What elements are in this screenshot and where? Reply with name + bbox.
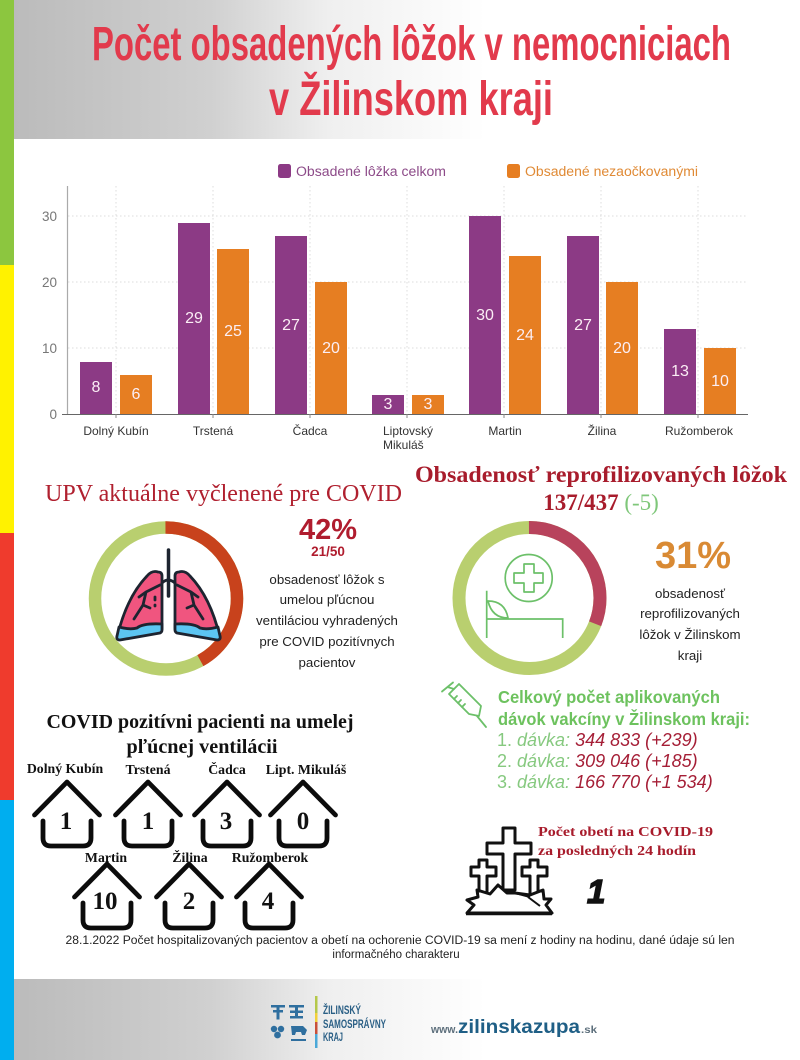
text: beds description: lôžok v Žilinskom [639, 627, 741, 642]
x axis labels: Martin [488, 424, 522, 438]
footnote [66, 935, 735, 961]
house: Žilina [156, 849, 222, 928]
heading: reprofiled beds: Obsadenosť reprofilizovaných lôžok [415, 462, 787, 487]
x axis labels: Čadca [293, 423, 328, 438]
website [430, 1016, 597, 1038]
y axis labels [42, 209, 57, 422]
y axis labels: 10 [42, 341, 57, 356]
bar values: 29 [185, 310, 203, 327]
heading: UPV: UPV aktuálne vyčlenené pre COVID [45, 481, 402, 507]
bar values [92, 307, 729, 413]
chart legend: Obsadené lôžka celkom [296, 164, 446, 179]
heading: ventilated patients: COVID pozitívni pacienti na umelej [46, 711, 354, 733]
heading: reprofiled beds [415, 462, 787, 515]
logo: Žilinský samosprávny kraj: SAMOSPRÁVNY [323, 1018, 386, 1031]
bar values: 24 [516, 327, 534, 344]
text: beds description: reprofilizovaných [640, 606, 740, 621]
house: Ružomberok: 4 [262, 888, 275, 915]
house: Liptovský Mikuláš: Lipt. Mikuláš [266, 762, 347, 777]
icon: crosses [466, 828, 552, 914]
text: ventilator description: pacientov [299, 655, 356, 670]
x axis labels: Liptovský [383, 424, 433, 438]
bar chart [42, 186, 748, 452]
heading: ventilated patients [46, 711, 354, 758]
house: Trstená: 1 [142, 808, 154, 835]
vaccination doses: 1. dávka: 344 833 (+239) [497, 730, 698, 750]
house: Liptovský Mikuláš [266, 762, 347, 846]
house: Martin: 10 [92, 888, 118, 915]
text: beds description [639, 586, 741, 663]
footnote: 28.1.2022 Počet hospitalizovaných pacientov a obetí na ochorenie COVID-19 sa mení z hodiny na hodinu, dané údaje sú len [66, 935, 735, 947]
chart legend: Obsadené nezaočkovanými [525, 164, 698, 179]
vaccination doses: Celkový počet aplikovaných [498, 687, 720, 707]
y axis labels: 20 [42, 275, 57, 290]
title [92, 18, 731, 126]
side colour strip [0, 0, 14, 1060]
footer band [14, 979, 800, 1060]
icon: syringe [442, 682, 486, 727]
x axis labels: Ružomberok [665, 424, 734, 438]
bar values: 20 [322, 340, 340, 357]
website: .sk [581, 1025, 597, 1036]
heading: deaths: Počet obetí na COVID-19 [538, 824, 713, 839]
house: Martin [74, 850, 140, 928]
house: Dolný Kubín [27, 761, 103, 846]
stat: 31%: 31% [655, 535, 731, 577]
stat: 42%: 21/50 [311, 544, 345, 559]
house: Ružomberok [232, 850, 309, 928]
house: Liptovský Mikuláš: 0 [297, 808, 309, 835]
house: Čadca: Čadca [208, 761, 246, 777]
x axis labels: Mikuláš [383, 438, 424, 452]
logo: Žilinský samosprávny kraj [271, 996, 386, 1048]
bar values: 25 [224, 323, 242, 340]
header band [14, 0, 800, 139]
hospital houses [27, 761, 347, 928]
bar values: 8 [92, 379, 101, 396]
x axis labels: Žilina [588, 423, 617, 438]
house: Čadca [194, 761, 260, 846]
vaccination doses: dávok vakcíny v Žilinskom kraji: [498, 708, 750, 729]
house: Žilina: Žilina [172, 849, 208, 865]
house: Čadca: 3 [220, 808, 232, 835]
title: v Žilinskom kraji [269, 71, 553, 126]
stat: deaths count: 1 [587, 873, 605, 910]
house: Martin: Martin [85, 850, 127, 865]
bar values: 30 [476, 307, 494, 324]
y axis labels: 0 [49, 407, 57, 422]
website: zilinskazupa [458, 1016, 580, 1038]
bar values: 10 [711, 373, 729, 390]
heading: deaths: za posledných 24 hodín [538, 843, 697, 858]
text: ventilator description: ventiláciou vyhradených [256, 613, 398, 628]
house: Trstená [116, 762, 180, 846]
text: beds description: obsadenosť [655, 586, 726, 601]
bar values: 13 [671, 363, 689, 380]
house: Trstená: Trstená [126, 762, 171, 777]
heading: reprofiled beds: 137/437 (-5) [543, 490, 659, 515]
icon: hospital bed [487, 554, 563, 638]
x axis labels: Dolný Kubín [83, 424, 149, 438]
bar values: 3 [424, 396, 433, 413]
bar values: 20 [613, 340, 631, 357]
house: Ružomberok: Ružomberok [232, 850, 309, 865]
house: Žilina: 2 [183, 888, 195, 915]
x axis labels: Trstená [193, 424, 233, 438]
x axis labels [83, 423, 734, 452]
text: beds description: kraji [678, 648, 702, 663]
heading: ventilated patients: pľúcnej ventilácii [126, 736, 278, 758]
icon: lungs [117, 550, 220, 640]
vaccination doses: 3. dávka: 166 770 (+1 534) [497, 772, 713, 792]
text: ventilator description [256, 572, 398, 670]
logo: Žilinský samosprávny kraj: ŽILINSKÝ [323, 1004, 361, 1017]
heading: deaths [538, 824, 713, 858]
donut: ventilators 42% [95, 528, 237, 670]
house: Dolný Kubín: 1 [60, 808, 72, 835]
text: ventilator description: umelou pľúcnou [280, 592, 374, 607]
vaccination doses: 2. dávka: 309 046 (+185) [497, 751, 698, 771]
y axis labels: 30 [42, 209, 57, 224]
footnote: informačného charakteru [332, 949, 460, 961]
bar values: 3 [384, 396, 393, 413]
bar values: 27 [574, 317, 592, 334]
website: www. [430, 1024, 458, 1036]
logo: Žilinský samosprávny kraj: KRAJ [323, 1032, 343, 1044]
bar values: 6 [132, 386, 141, 403]
stat: 42%: 42% [299, 514, 357, 546]
house: Dolný Kubín: Dolný Kubín [27, 761, 103, 776]
chart legend [278, 164, 698, 179]
bar values: 27 [282, 317, 300, 334]
text: ventilator description: pre COVID pozitívnych [259, 634, 395, 649]
vaccination doses [497, 687, 750, 792]
donut: reprofiled beds 31% [459, 528, 600, 668]
text: ventilator description: obsadenosť lôžok s [269, 572, 385, 587]
